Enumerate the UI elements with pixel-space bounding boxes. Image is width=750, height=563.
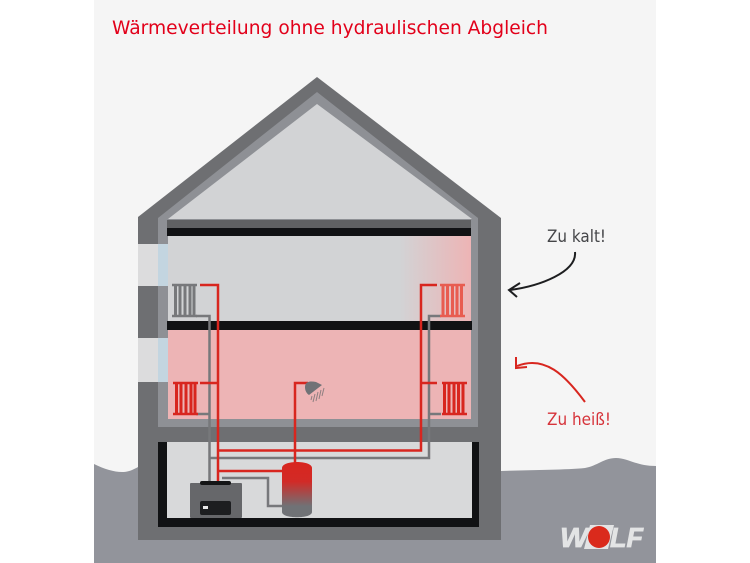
- background panel: [94, 0, 656, 563]
- attic: [168, 104, 472, 219]
- radiator: upper right: [440, 285, 465, 316]
- arrow: cold: [509, 252, 575, 297]
- radiator: lower left (hot): [173, 383, 198, 414]
- radiator: upper left (off): [172, 285, 197, 316]
- upper room: [168, 236, 471, 321]
- lower room: [168, 330, 471, 419]
- logo: WOLF: [560, 522, 644, 553]
- label: Zu heiß: Zu heiß!: [547, 410, 611, 430]
- radiator: lower right: [442, 383, 467, 414]
- pipes: [196, 285, 441, 506]
- inner wall layer: [158, 92, 478, 427]
- basement: [158, 442, 479, 527]
- house: [138, 77, 501, 540]
- hot water tank: [282, 462, 312, 517]
- upper room warm zone: [400, 236, 471, 321]
- upper window: [138, 244, 168, 286]
- title: Wärmeverteilung ohne hydraulischen Abgleich: [112, 18, 548, 39]
- attic floor band: [167, 220, 471, 228]
- return pipes: [196, 316, 441, 506]
- lower window: [138, 338, 168, 382]
- upper ceiling beam: [167, 228, 471, 236]
- icon: shower: [305, 382, 324, 402]
- ground: [94, 458, 656, 563]
- logo: WOLF: W: [560, 522, 591, 553]
- supply pipes: [200, 285, 437, 484]
- label: Zu kalt: Zu kalt!: [547, 227, 606, 247]
- boiler: [190, 481, 242, 518]
- outer wall: [138, 77, 501, 540]
- arrow: hot: [516, 357, 585, 402]
- logo: WOLF: LF: [610, 522, 644, 553]
- middle floor beam: [167, 321, 472, 330]
